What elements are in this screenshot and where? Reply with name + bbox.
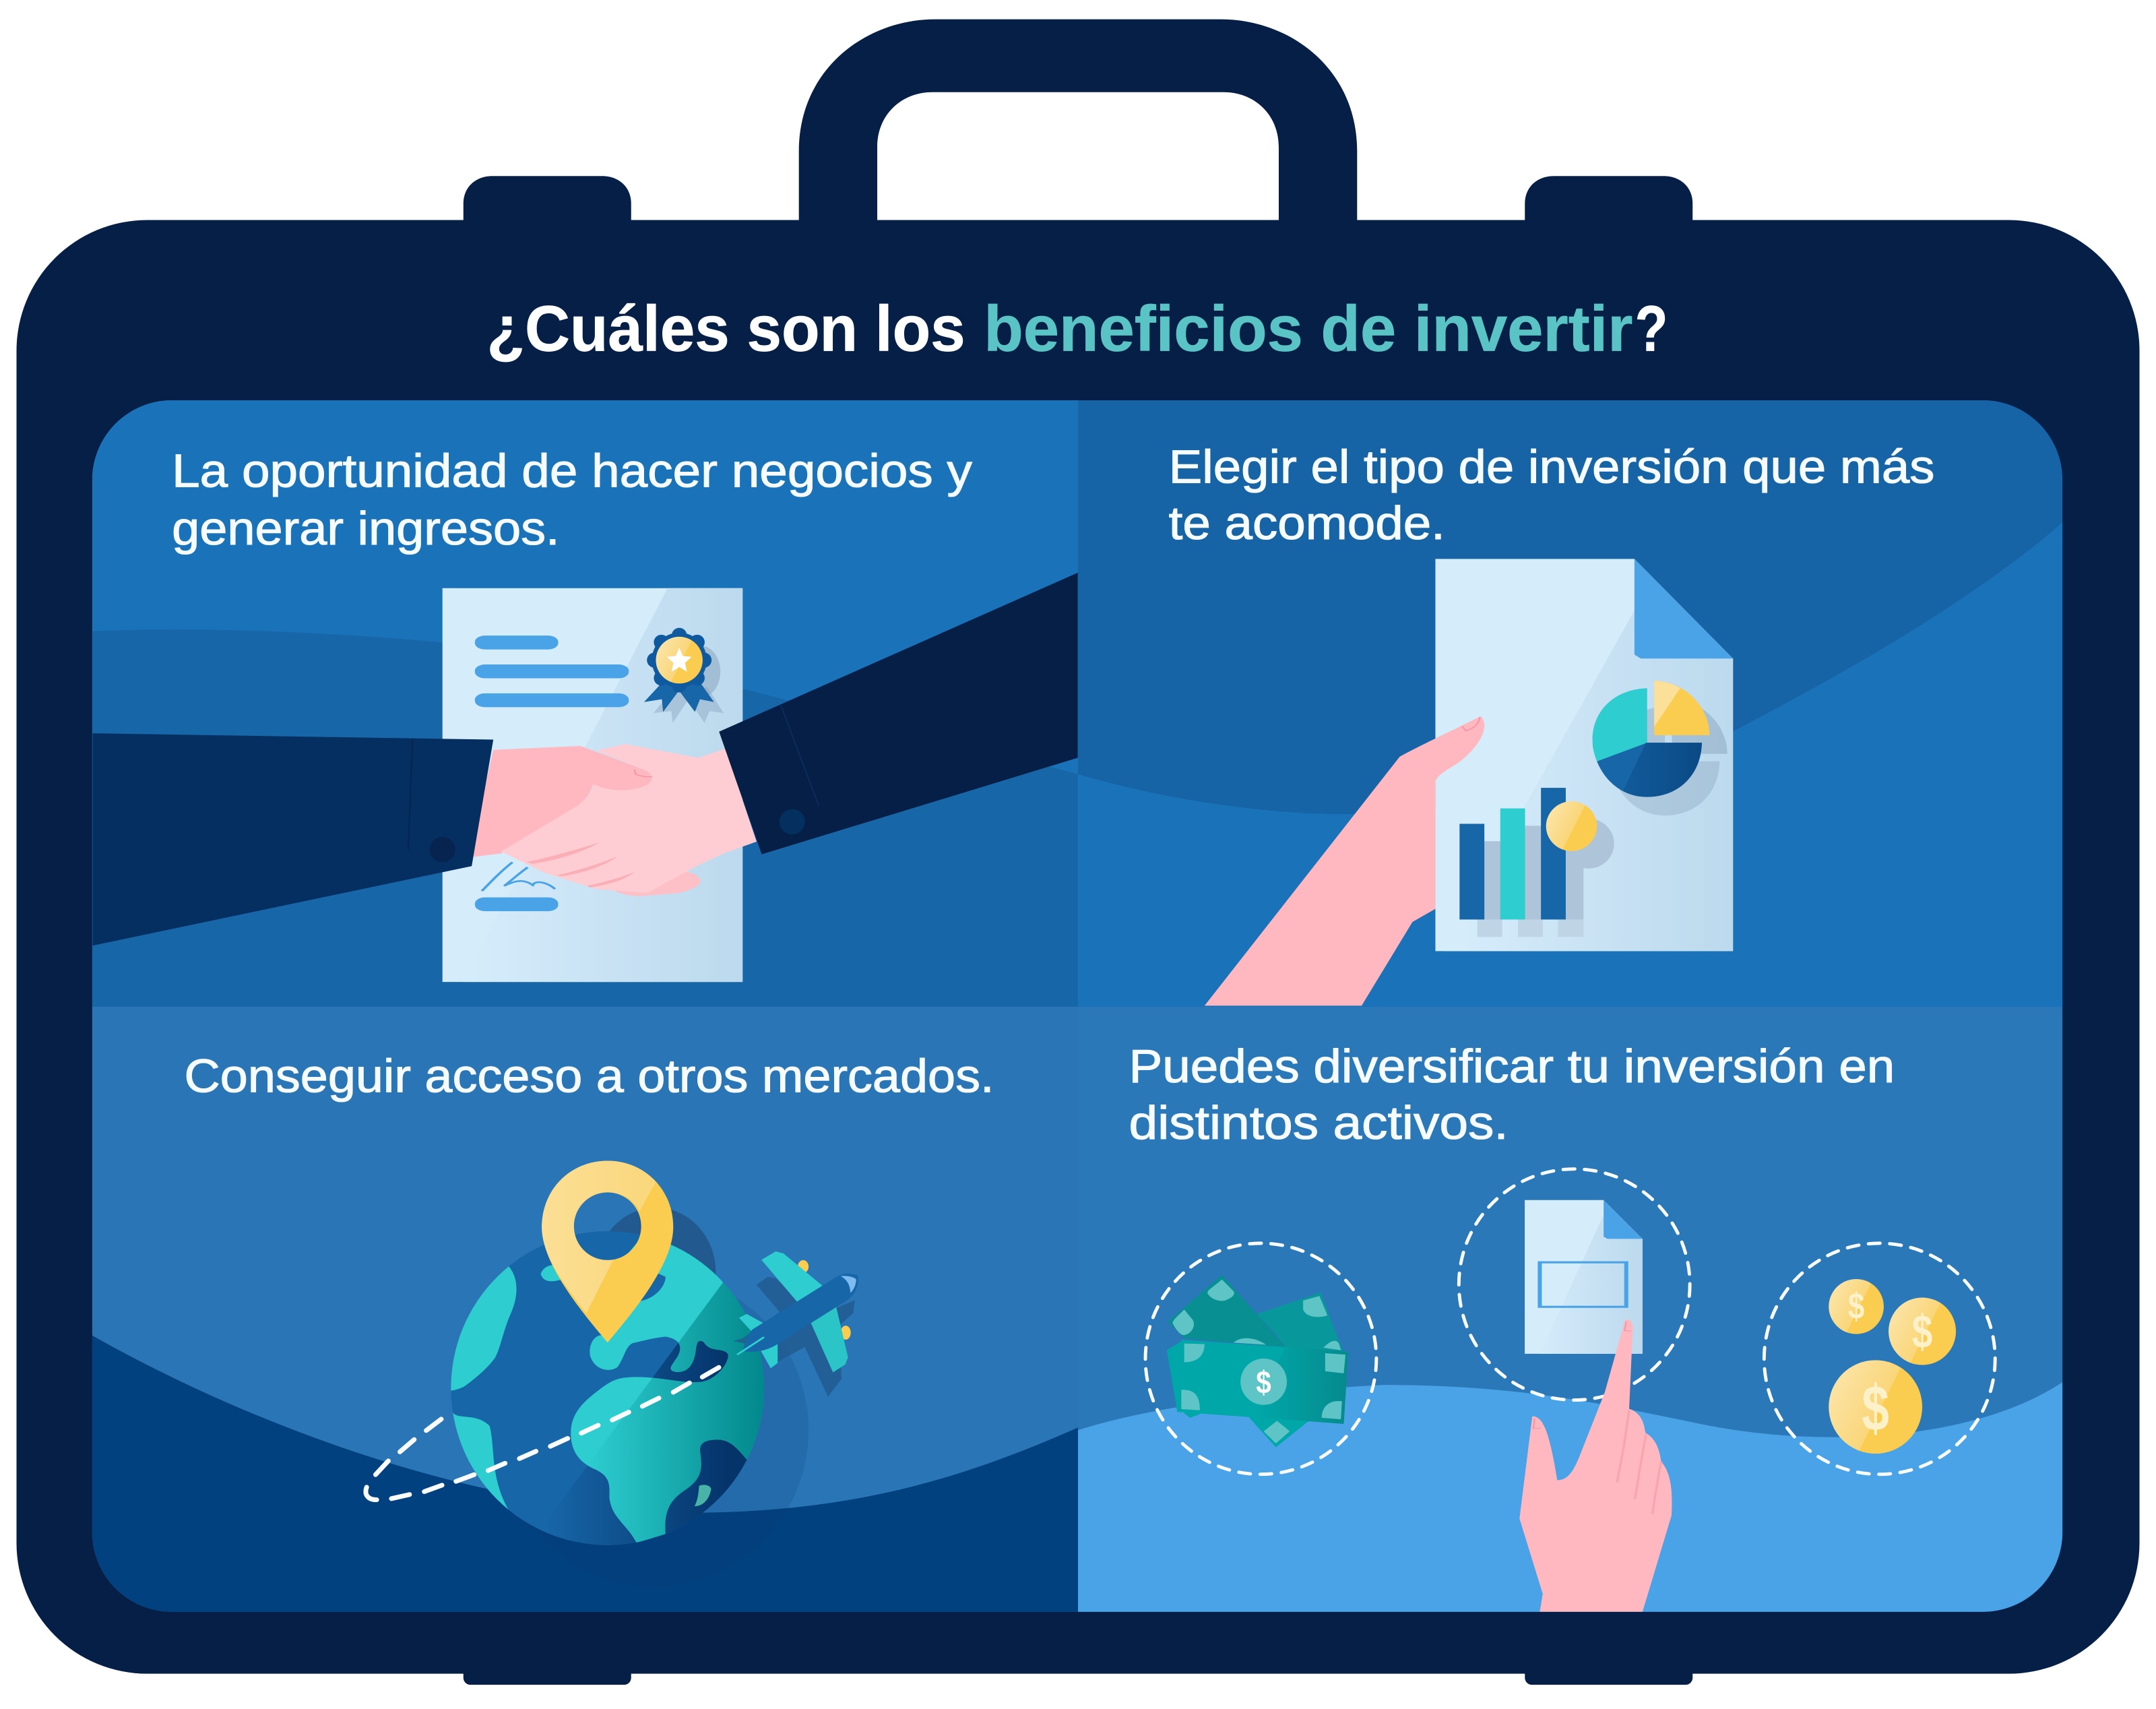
right bottom clasp bbox=[1525, 1650, 1692, 1685]
heading: markets: Conseguir acceso a otros mercados. bbox=[184, 1049, 994, 1102]
left top clasp bbox=[464, 176, 631, 234]
heading: investment type: te acomode. bbox=[1169, 497, 1445, 549]
report document bbox=[1435, 559, 1733, 951]
report and hand illustration bbox=[1205, 559, 1733, 1005]
heading: diversify: Puedes diversificar tu inversión en bbox=[1129, 1040, 1895, 1092]
medal seal bbox=[647, 628, 711, 693]
dashed flight path bbox=[366, 1367, 719, 1500]
right arm sleeve bbox=[719, 573, 1078, 854]
heading: investment type: Elegir el tipo de inversión que más bbox=[1169, 440, 1934, 493]
panel: choose investment type bbox=[1078, 400, 2062, 1007]
briefcase handle bbox=[799, 20, 1357, 247]
icon: coins: $ bbox=[1912, 1305, 1932, 1358]
icon: cash bills: $ bbox=[1256, 1365, 1271, 1400]
heading: diversify: distintos activos. bbox=[1129, 1096, 1509, 1149]
dashed circles bbox=[1145, 1169, 1995, 1474]
handshake illustration bbox=[93, 573, 1078, 982]
airplane bbox=[733, 1251, 858, 1396]
icon: coins: $ bbox=[1862, 1372, 1889, 1444]
heading: business opportunity: generar ingresos. bbox=[172, 502, 560, 555]
panel: business opportunity bbox=[92, 400, 1078, 1007]
pointing hand bbox=[1519, 1319, 1672, 1612]
panels bbox=[92, 400, 2062, 1612]
map pin bbox=[542, 1160, 673, 1342]
title: ¿Cuáles son los bbox=[486, 292, 965, 365]
title: ? bbox=[1635, 292, 1668, 365]
globe bbox=[445, 1229, 770, 1547]
panel: access to markets bbox=[92, 1007, 1078, 1612]
globe illustration bbox=[366, 1160, 858, 1586]
heading: business opportunity: La oportunidad de hacer negocios y bbox=[172, 444, 972, 497]
title: beneficios de invertir bbox=[984, 292, 1632, 365]
icon: coins: $ bbox=[1848, 1285, 1864, 1327]
icon: document bbox=[1525, 1200, 1643, 1354]
left bottom clasp bbox=[464, 1650, 631, 1685]
continents bbox=[445, 1231, 770, 1543]
title bbox=[486, 292, 1668, 365]
left arm sleeve bbox=[93, 733, 757, 945]
right top clasp bbox=[1525, 176, 1692, 234]
medal ribbon bbox=[644, 646, 724, 723]
bar chart bbox=[1459, 788, 1614, 937]
icon: cash bills bbox=[1167, 1275, 1348, 1448]
certificate document bbox=[443, 588, 742, 982]
hand holding report bbox=[1205, 716, 1484, 1005]
globe shadow bbox=[499, 1208, 808, 1586]
pie chart bbox=[1593, 681, 1727, 815]
icon: coins bbox=[1829, 1279, 1956, 1454]
panel: diversify assets bbox=[1078, 1007, 2062, 1612]
